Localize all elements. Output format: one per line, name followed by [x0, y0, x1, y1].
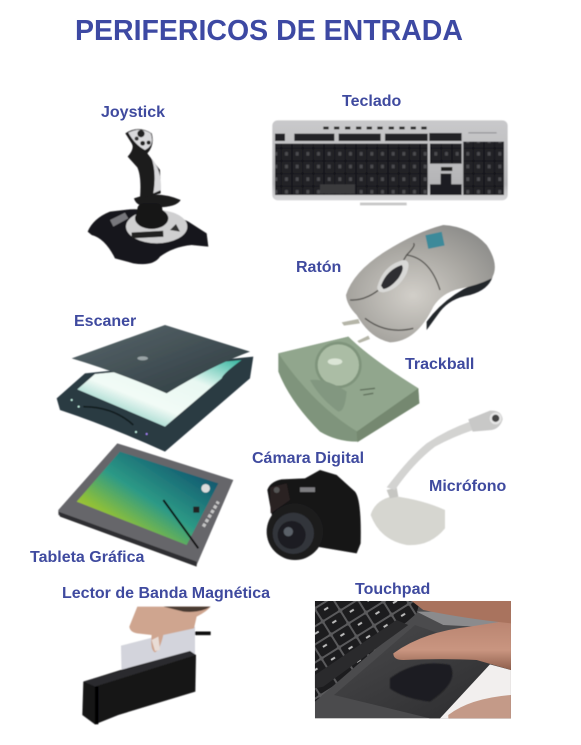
label: Micrófono: Micrófono — [429, 478, 507, 495]
icon: magnetic card reader — [82, 607, 211, 724]
label: Teclado: Teclado — [342, 93, 402, 110]
icon: scanner — [57, 325, 253, 452]
title: PERIFERICOS DE ENTRADA — [75, 15, 463, 47]
label: Escaner: Escaner — [74, 313, 136, 330]
icon: joystick — [88, 129, 208, 264]
icon: mouse — [342, 225, 495, 343]
label: Cámara Digital: Cámara Digital — [252, 450, 364, 467]
label: Joystick: Joystick — [101, 104, 165, 121]
label: Trackball: Trackball — [405, 356, 474, 373]
icon: tablet — [58, 443, 233, 567]
label: Tableta Gráfica: Tableta Gráfica — [30, 549, 145, 566]
icon: microphone — [371, 411, 503, 545]
icon: touchpad photo — [315, 601, 511, 718]
icon: keyboard — [272, 120, 508, 205]
label: Lector de Banda Magnética: Lector de Banda Magnética — [62, 585, 270, 602]
icon: trackball — [278, 337, 419, 442]
label: Ratón: Ratón — [296, 259, 341, 276]
icon: camera — [267, 470, 361, 560]
label: Touchpad: Touchpad — [355, 581, 430, 598]
